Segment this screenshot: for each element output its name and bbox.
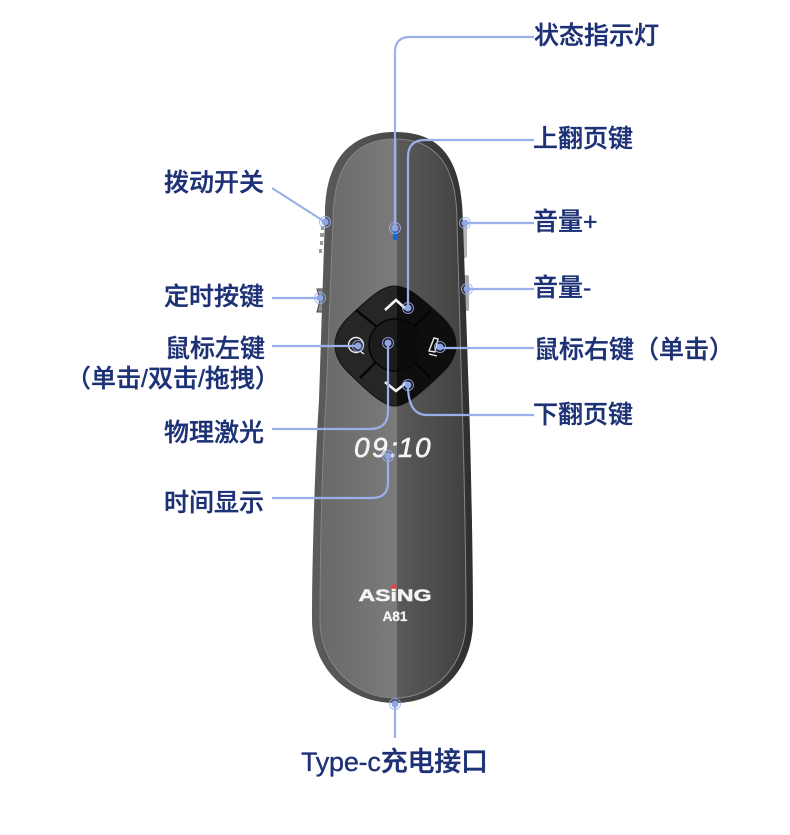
- leader: page down: [402, 380, 534, 415]
- icon: pen: [429, 338, 438, 356]
- label: time display: 时间显示: [164, 489, 264, 517]
- label: right click: 鼠标右键（单击）: [534, 336, 734, 364]
- label: slide switch: 拨动开关: [164, 169, 264, 197]
- leader: timer key: [272, 292, 326, 304]
- label: volume up: 音量+: [533, 208, 598, 236]
- leader: slide switch: [272, 188, 330, 228]
- time display: 09:10: [354, 432, 431, 463]
- leader: status LED: [390, 37, 534, 234]
- label: timer key: 定时按键: [164, 283, 264, 311]
- presenter remote body: [312, 130, 473, 710]
- leader: laser: [272, 338, 394, 429]
- status LED: [393, 231, 398, 240]
- label: page down key: 下翻页键: [533, 401, 633, 429]
- leader: right click: [434, 342, 534, 352]
- label: physical laser: 物理激光: [164, 419, 264, 447]
- label: left click functions: （单击/双击/拖拽）: [66, 365, 280, 393]
- outer shell: [312, 132, 473, 703]
- top panel: [320, 140, 466, 698]
- model number: A81: [383, 609, 408, 624]
- label: status indicator: 状态指示灯: [534, 22, 659, 50]
- leader: volume down: [462, 284, 534, 294]
- icon: magnifier: [348, 338, 364, 354]
- centre button: [369, 319, 421, 371]
- leader: time display: [272, 450, 394, 498]
- logo: ASiNG: ASiNG: [358, 586, 432, 605]
- leader: page up: [402, 140, 534, 314]
- D-pad: [335, 286, 456, 406]
- side buttons: [317, 222, 469, 312]
- icon: up chevron: [385, 300, 407, 310]
- logo: ASiNG: [358, 584, 432, 605]
- icon: down chevron: [385, 382, 407, 391]
- label: type-c charging port: Type-c充电接口: [301, 747, 488, 777]
- leader: volume up: [460, 218, 534, 228]
- pad base: [335, 286, 456, 406]
- label: left click: 鼠标左键: [165, 335, 265, 363]
- leader: type-c port: [390, 698, 400, 738]
- button dividers: [356, 310, 431, 378]
- leader: left click: [272, 340, 364, 352]
- label: volume down: 音量-: [533, 274, 591, 302]
- label: page up key: 上翻页键: [533, 125, 633, 153]
